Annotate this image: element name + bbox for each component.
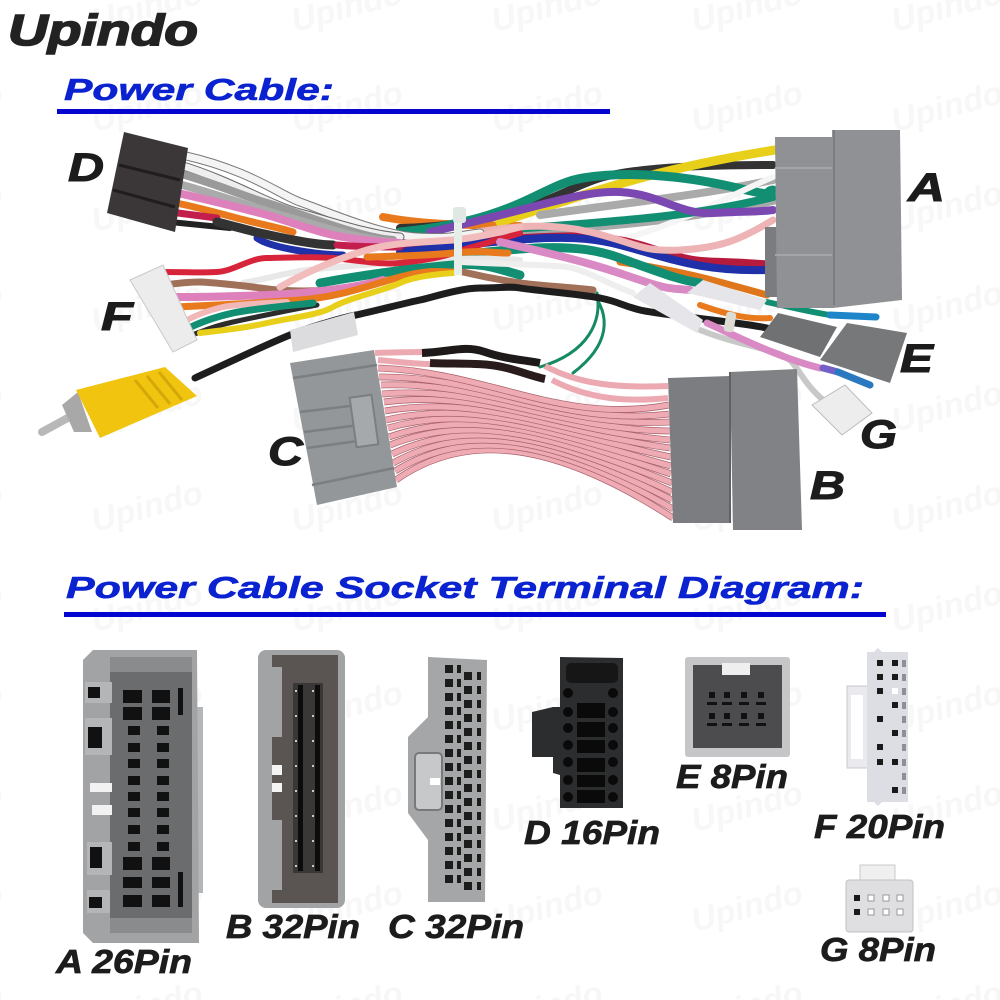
socket A 26Pin <box>55 650 203 980</box>
label D 16Pin: D 16Pin <box>524 814 660 851</box>
cable tie <box>453 207 466 275</box>
pink cable bundle <box>375 349 673 518</box>
label B 32Pin: B 32Pin <box>226 908 360 945</box>
label C 32Pin: C 32Pin <box>388 908 524 945</box>
connector B <box>668 369 845 530</box>
label E 8Pin: E 8Pin <box>676 758 788 795</box>
label E: E <box>900 337 935 381</box>
socket B 32Pin <box>226 650 360 945</box>
label G 8Pin: G 8Pin <box>820 931 936 968</box>
socket G 8Pin <box>820 865 936 968</box>
connector E <box>760 313 935 383</box>
label F: F <box>101 295 135 339</box>
connector G <box>812 385 897 457</box>
small cable tie <box>723 311 737 333</box>
connector F <box>101 265 197 352</box>
logo: Upindo: Upindo <box>8 6 198 55</box>
connector A <box>765 130 945 308</box>
heading: Power Cable: Power Cable: <box>64 72 334 107</box>
label A 26Pin: A 26Pin <box>55 943 192 980</box>
label C: C <box>268 430 304 474</box>
wire tag on black cable <box>290 312 358 352</box>
label B: B <box>810 464 845 508</box>
socket C 32Pin <box>388 657 524 945</box>
label A: A <box>907 166 945 210</box>
connector D <box>68 132 188 232</box>
RCA plug <box>42 367 197 438</box>
cable harness: wires <box>163 150 876 400</box>
socket F 20Pin <box>814 648 945 845</box>
socket E 8Pin <box>676 657 790 795</box>
heading: Power Cable Socket Terminal Diagram <box>64 570 886 617</box>
connector C <box>268 350 397 505</box>
label F 20Pin: F 20Pin <box>814 808 945 845</box>
heading: Power Cable <box>57 72 610 114</box>
label D: D <box>68 146 104 190</box>
label G: G <box>860 413 897 457</box>
socket D 16Pin <box>524 657 660 851</box>
wire labels KEY <box>633 280 767 333</box>
heading: Power Cable Socket Terminal Diagram: Power Cable Socket Terminal Diagram: <box>66 570 864 605</box>
